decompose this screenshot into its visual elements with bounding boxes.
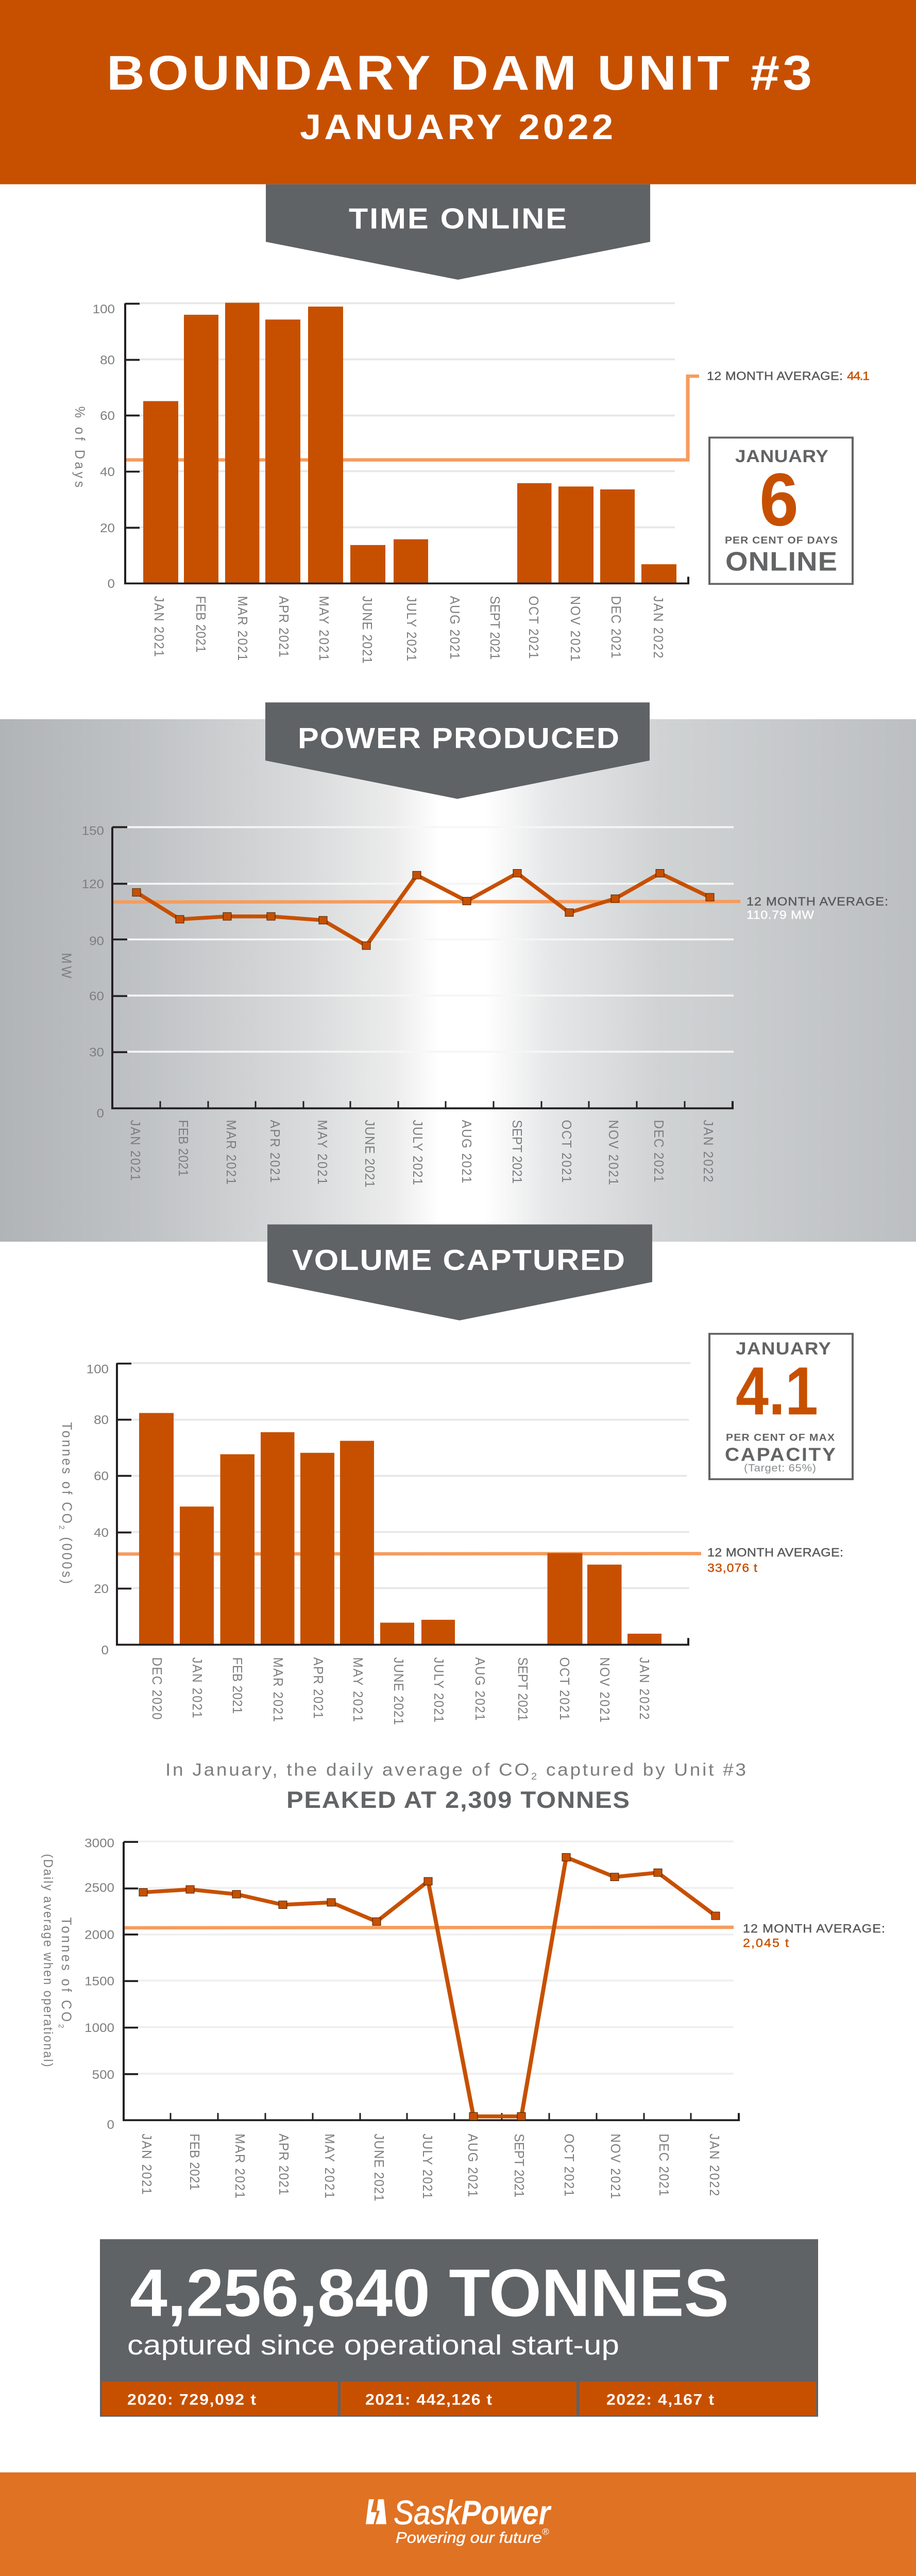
y axis labels: 40 [94, 1526, 109, 1540]
12 month average label: volume captured: 33,076 t [707, 1562, 757, 1575]
x axis labels: NOV 2021 [568, 596, 583, 661]
heading: daily average peak: PEAKED AT 2,309 TONNES [286, 1787, 630, 1814]
x axis labels: APR 2021 [267, 1120, 282, 1183]
y axis labels: 100 [87, 1362, 109, 1376]
average line [117, 1552, 701, 1556]
y axis labels: 2500 [84, 1881, 114, 1895]
12 month average label: daily tonnes: 2,045 t [743, 1937, 789, 1950]
year cell 2022 [580, 2382, 816, 2415]
y axis labels: 60 [100, 409, 115, 423]
y axis title: Tonnes of CO [59, 1917, 75, 2022]
x axis labels: JUNE 2021 [362, 1120, 377, 1188]
callout: 6 per cent of days online: PER CENT OF DAYS [725, 535, 838, 546]
x axis labels: MAR 2021 [270, 1657, 285, 1722]
y axis title: (000s) [59, 1531, 75, 1584]
x axis labels: FEB 2021 [176, 1120, 191, 1176]
y axis title: (Daily average when operational) [41, 1854, 55, 2067]
x axis labels: NOV 2021 [597, 1657, 612, 1722]
axes [125, 303, 688, 583]
SaskPower logo: Powering our future [396, 2529, 542, 2546]
x axis labels: NOV 2021 [608, 2133, 623, 2199]
y axis title: MW [59, 953, 75, 978]
callout: 4.1 per cent of max capacity: 4.1 [736, 1353, 818, 1429]
panel: total tonnes captured [100, 2239, 818, 2417]
footer band [0, 2472, 916, 2576]
callout: 6 per cent of days online: 6 [759, 458, 799, 541]
x axis labels: SEPT 2021 [512, 2133, 527, 2197]
bars [143, 303, 676, 583]
x axis labels: JAN 2021 [151, 596, 166, 657]
x axis labels: JULY 2021 [404, 596, 419, 661]
y axis labels: 1500 [84, 1974, 114, 1988]
y axis title: Tonnes of CO [59, 1422, 75, 1523]
SaskPower logo: Power [461, 2494, 552, 2532]
12 month average label: power produced [747, 895, 888, 922]
callout: 4.1 per cent of max capacity: (Target: 65%) [744, 1462, 816, 1474]
y axis labels: 0 [108, 577, 115, 591]
y axis labels: 500 [92, 2068, 114, 2082]
line chart: daily average tonnes [41, 1836, 739, 2201]
section: power produced heading: POWER PRODUCED [298, 722, 619, 754]
y axis labels: 40 [100, 465, 115, 479]
x axis labels: SEPT 2021 [515, 1657, 530, 1721]
section: power produced heading [265, 702, 650, 799]
x axis labels: APR 2021 [276, 596, 291, 657]
heading: daily average peak: In January, the daily average of CO [165, 1760, 529, 1780]
callout: 6 per cent of days online [709, 437, 853, 584]
y axis labels: 3000 [84, 1836, 114, 1850]
y axis labels: 60 [94, 1469, 109, 1483]
x axis labels: OCT 2021 [557, 1657, 572, 1720]
x axis labels: SEPT 2021 [510, 1120, 524, 1183]
x axis labels: MAY 2021 [322, 2133, 337, 2198]
title: BOUNDARY DAM UNIT #3 [107, 45, 812, 100]
axes [124, 1842, 739, 2120]
callout: 6 per cent of days online: ONLINE [725, 547, 837, 577]
year cell 2022: 2022: 4,167 t [606, 2391, 714, 2408]
icon: tower with lightning bolt [366, 2499, 386, 2524]
12 month average label: power produced: 110.79 MW [747, 908, 814, 922]
year cell 2021 [341, 2382, 576, 2415]
x axis labels [151, 596, 666, 664]
12 month average label: daily tonnes: 12 MONTH AVERAGE: [743, 1922, 885, 1936]
x axis labels: AUG 2021 [472, 1657, 487, 1721]
average line [112, 900, 740, 904]
12 month average label: time online: 44.1 [847, 369, 870, 383]
x axis labels: JAN 2022 [707, 2133, 722, 2196]
x axis labels: FEB 2021 [187, 2133, 202, 2190]
x axis labels: JULY 2021 [410, 1120, 425, 1185]
section: volume captured heading [267, 1225, 652, 1320]
x axis labels: JUNE 2021 [360, 596, 375, 664]
y axis title: 2 [57, 1526, 65, 1530]
x axis labels: MAR 2021 [235, 596, 250, 660]
x axis labels: AUG 2021 [447, 596, 462, 659]
heading: daily average peak [165, 1760, 746, 1814]
x axis labels [149, 1657, 652, 1725]
x axis labels: DEC 2021 [651, 1120, 666, 1182]
data line [143, 1857, 716, 2116]
x axis labels: DEC 2020 [149, 1657, 164, 1720]
data markers [132, 869, 714, 950]
y axis labels: 0 [107, 2118, 114, 2132]
average line [124, 1925, 734, 1929]
x axis labels: SEPT 2021 [487, 596, 502, 659]
x axis labels: JAN 2022 [651, 596, 666, 658]
SaskPower logo: ® [542, 2527, 549, 2537]
x axis labels: OCT 2021 [562, 2133, 576, 2196]
header banner [0, 0, 916, 184]
bar chart: time online [72, 302, 699, 664]
12 month average label: daily tonnes [743, 1922, 885, 1950]
12 month average label: volume captured [707, 1546, 843, 1575]
callout: 4.1 per cent of max capacity: JANUARY [736, 1338, 831, 1359]
y axis labels: 150 [82, 824, 104, 838]
y axis labels: 60 [89, 989, 104, 1003]
y axis labels: 100 [93, 302, 115, 316]
total figure: 4,256,840 TONNES [130, 2256, 729, 2330]
12 month average label: time online: 12 MONTH AVERAGE: [707, 369, 843, 383]
y axis labels: 30 [89, 1045, 104, 1059]
y axis title: 2 [57, 2024, 65, 2028]
x axis labels: OCT 2021 [559, 1120, 574, 1183]
y axis labels: 20 [94, 1582, 109, 1596]
y axis labels: 2000 [84, 1928, 114, 1942]
x axis labels: JAN 2022 [637, 1657, 652, 1720]
callout: 4.1 per cent of max capacity: PER CENT OF MAX [726, 1432, 835, 1443]
x axis labels: JAN 2022 [701, 1120, 716, 1182]
y axis labels: 0 [97, 1107, 104, 1121]
12 month average label: power produced: 12 MONTH AVERAGE: [747, 895, 888, 908]
y axis title: % of Days [72, 406, 88, 487]
data line [137, 873, 710, 946]
y axis labels: 0 [101, 1643, 109, 1657]
x axis labels: MAR 2021 [232, 2133, 247, 2198]
x axis labels: JAN 2021 [128, 1120, 143, 1181]
year cell 2021: 2021: 442,126 t [365, 2391, 492, 2408]
x axis labels: FEB 2021 [193, 596, 208, 653]
x axis labels: MAY 2021 [316, 596, 331, 660]
x axis labels [139, 2133, 722, 2201]
total caption: captured since operational start-up [127, 2329, 619, 2360]
x axis labels: AUG 2021 [465, 2133, 480, 2197]
section: time online heading [266, 184, 650, 280]
line chart: power produced [59, 824, 740, 1188]
x axis labels: JAN 2021 [190, 1657, 205, 1718]
section background: power produced [0, 719, 916, 1242]
y axis labels: 1000 [84, 2021, 114, 2035]
SaskPower logo: Sask [394, 2494, 462, 2532]
y axis labels [87, 1362, 109, 1657]
average line with leader [125, 376, 699, 460]
x axis labels: FEB 2021 [230, 1657, 245, 1714]
y axis labels [93, 302, 115, 591]
x axis labels: MAY 2021 [315, 1120, 330, 1184]
bars [139, 1413, 661, 1645]
x axis labels: MAY 2021 [350, 1657, 365, 1722]
y axis labels: 20 [100, 521, 115, 535]
x axis labels: JULY 2021 [420, 2133, 435, 2199]
12 month average label: volume captured: 12 MONTH AVERAGE: [707, 1546, 843, 1560]
y axis title [41, 1854, 75, 2067]
x axis labels: JUNE 2021 [371, 2133, 386, 2201]
axes [117, 1363, 688, 1645]
x axis labels: DEC 2021 [656, 2133, 671, 2196]
callout: 4.1 per cent of max capacity [709, 1334, 853, 1479]
year cell 2020: 2020: 729,092 t [127, 2391, 256, 2408]
y axis labels: 80 [100, 353, 115, 367]
subtitle: JANUARY 2022 [300, 107, 613, 147]
x axis labels: JUNE 2021 [391, 1657, 406, 1725]
callout: 4.1 per cent of max capacity: CAPACITY [725, 1444, 836, 1465]
y axis labels: 120 [82, 877, 104, 891]
x axis labels: JULY 2021 [431, 1657, 446, 1722]
y axis labels [84, 1836, 114, 2132]
heading: daily average peak: captured by Unit #3 [539, 1760, 746, 1780]
year cell 2020 [102, 2382, 338, 2415]
axes [112, 827, 733, 1108]
y axis labels [82, 824, 104, 1121]
section: volume captured heading: VOLUME CAPTURED [292, 1244, 625, 1277]
SaskPower logo [366, 2494, 552, 2546]
x axis labels: APR 2021 [311, 1657, 326, 1719]
x axis labels: OCT 2021 [526, 596, 541, 659]
x axis labels: DEC 2021 [608, 596, 623, 658]
x axis labels: APR 2021 [276, 2133, 291, 2195]
data markers [139, 1854, 720, 2120]
callout: 6 per cent of days online: JANUARY [735, 446, 828, 466]
section: time online heading: TIME ONLINE [349, 202, 567, 235]
heading: daily average peak: 2 [531, 1772, 537, 1782]
y axis labels: 90 [89, 934, 104, 948]
x axis labels [128, 1120, 716, 1188]
x axis labels: JAN 2021 [139, 2133, 154, 2195]
x axis labels: AUG 2021 [459, 1120, 474, 1183]
x axis labels: NOV 2021 [606, 1120, 621, 1185]
bar chart: volume captured [57, 1362, 701, 1725]
y axis labels: 80 [94, 1413, 109, 1427]
x axis labels: MAR 2021 [224, 1120, 239, 1184]
